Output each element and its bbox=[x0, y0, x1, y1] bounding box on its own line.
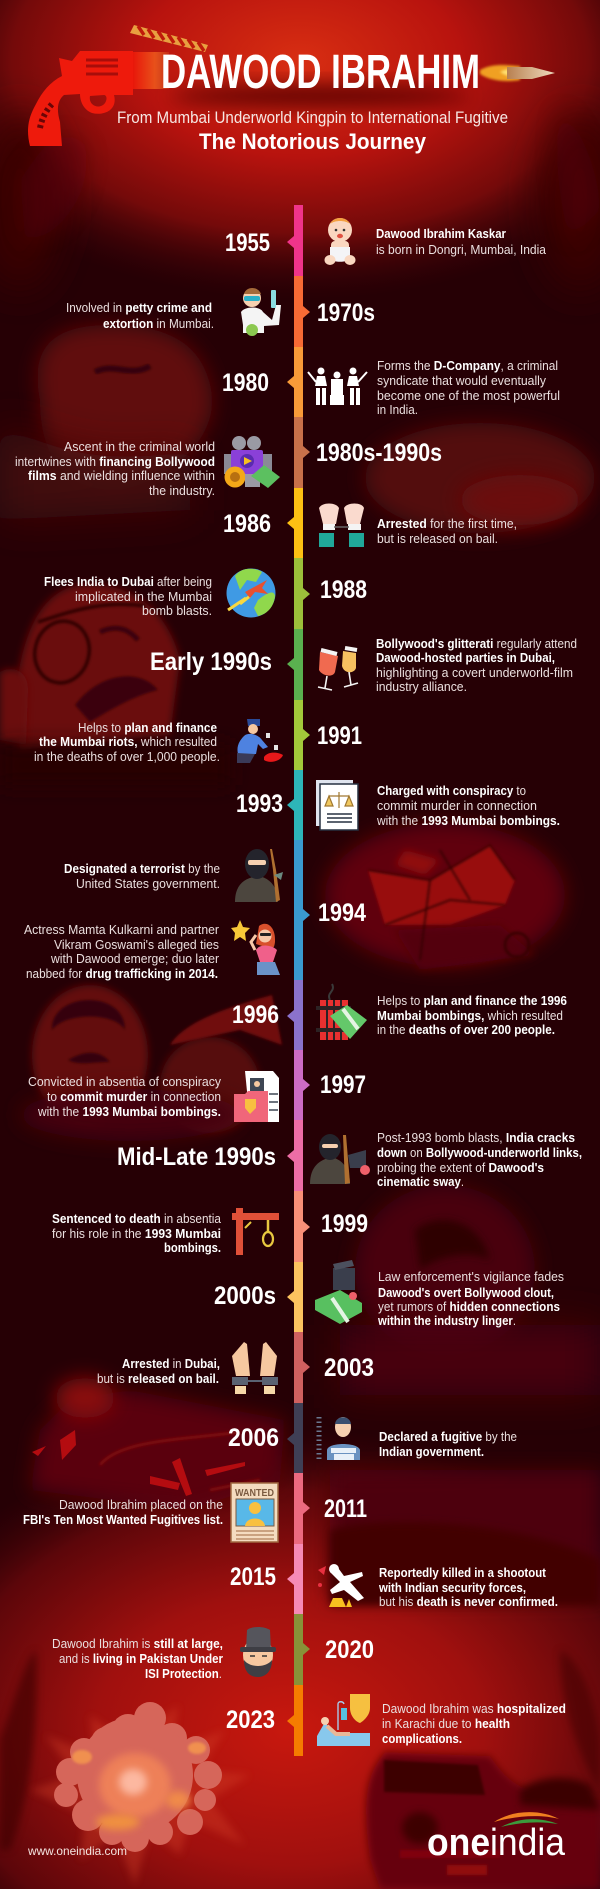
logo: oneindia: oneindia bbox=[427, 1822, 566, 1864]
icon: police file folder bbox=[234, 1071, 279, 1122]
icon: gallows bbox=[232, 1208, 279, 1255]
text: 1970s: extortion in Mumbai. bbox=[103, 316, 214, 331]
text: 1980s-1990s bbox=[15, 439, 215, 498]
text: Mid-Late 1990s: Post-1993 bomb blasts, India cracks bbox=[377, 1130, 575, 1145]
text: 1996: Helps to plan and finance the 1996 bbox=[377, 993, 567, 1008]
text: 1996: Mumbai bombings, which resulted bbox=[377, 1008, 563, 1023]
icon: bearded man with hat bbox=[240, 1627, 276, 1677]
text: 2011 bbox=[23, 1497, 223, 1527]
text: 2006: Declared a fugitive by the bbox=[379, 1429, 517, 1444]
entry: Mid-Late 1990s bbox=[117, 1130, 582, 1189]
text: 2015: but his death is never confirmed. bbox=[379, 1594, 558, 1609]
text: 2003: Arrested in Dubai, bbox=[122, 1356, 220, 1371]
text: actress bbox=[24, 922, 220, 981]
text: 2020: and is living in Pakistan Under bbox=[59, 1651, 223, 1666]
text: 2011: Dawood Ibrahim placed on the bbox=[59, 1497, 223, 1512]
text: terrorist bbox=[64, 861, 220, 891]
year 1997: 1997 bbox=[320, 1071, 366, 1099]
text: 1999: Sentenced to death in absentia bbox=[52, 1211, 222, 1226]
year 2011: 2011 bbox=[324, 1495, 367, 1523]
entry: Early 1990s bbox=[150, 636, 577, 694]
title: DAWOOD IBRAHIM bbox=[161, 46, 480, 99]
text: 1980s-1990s: films and wielding influence within bbox=[28, 468, 215, 483]
text: 1993 bbox=[376, 783, 560, 828]
entry: 2000s bbox=[214, 1260, 564, 1328]
subtitle: From Mumbai Underworld Kingpin to International Fugitive bbox=[117, 108, 508, 127]
year 2006: 2006 bbox=[228, 1424, 279, 1452]
text: 1999: bombings. bbox=[164, 1240, 221, 1255]
icon: terrorist with rifle bbox=[235, 849, 283, 902]
icon: handcuffed fists bbox=[319, 504, 364, 547]
text: 2000s bbox=[377, 1269, 564, 1328]
background photo: man with glasses bbox=[0, 584, 230, 785]
text: Early 1990s: Bollywood's glitterati regularly attend bbox=[376, 636, 577, 651]
entry: 2023 bbox=[226, 1694, 566, 1746]
background photo: rubble bbox=[30, 1378, 285, 1510]
text: 2000s: within the industry linger. bbox=[377, 1313, 516, 1328]
entry: 1991 bbox=[34, 719, 362, 764]
background photo: crowd top right bbox=[365, 423, 595, 533]
text: 2023: Dawood Ibrahim was hospitalized bbox=[382, 1701, 566, 1716]
text: Early 1990s: highlighting a covert underworld-film bbox=[376, 665, 573, 680]
year 1991: 1991 bbox=[317, 722, 362, 750]
icon: crime syndicate boss bbox=[308, 368, 367, 405]
text: 1991: in the deaths of over 1,000 people. bbox=[34, 749, 220, 764]
year 1993: 1993 bbox=[236, 790, 283, 818]
text: Early 1990s: industry alliance. bbox=[376, 679, 467, 694]
text: 2015: with Indian security forces, bbox=[378, 1580, 526, 1595]
entry: 1993 bbox=[236, 780, 560, 830]
text: 1993: Charged with conspiracy to bbox=[377, 783, 526, 798]
icon: masked criminal with test tube bbox=[241, 288, 281, 336]
text: actress: with Dawood emerge; duo later bbox=[50, 951, 220, 966]
entry: 2003 bbox=[97, 1342, 374, 1394]
background photo: man at right bbox=[340, 1185, 600, 1395]
text: 1993: commit murder in connection bbox=[377, 798, 537, 813]
gun illustration bbox=[28, 25, 208, 146]
year 1988: 1988 bbox=[320, 576, 367, 604]
text: 2020: Dawood Ibrahim is still at large, bbox=[52, 1636, 223, 1651]
text: 1991: Helps to plan and finance bbox=[78, 720, 217, 735]
entry: 1980s-1990s bbox=[15, 436, 442, 498]
icon: money and clapperboard bbox=[315, 1260, 362, 1324]
text: 1988: implicated in the Mumbai bbox=[75, 589, 212, 604]
text: 1991 bbox=[34, 720, 220, 764]
text: 2003: but is released on bail. bbox=[97, 1371, 219, 1386]
year 1970s: 1970s bbox=[317, 299, 375, 327]
entry: 2015 bbox=[230, 1563, 558, 1609]
icon: wanted poster bbox=[231, 1483, 278, 1542]
text: 1997: to commit murder in connection bbox=[47, 1089, 221, 1104]
text: 2006: Indian government. bbox=[379, 1444, 484, 1459]
icon: wine glasses bbox=[318, 648, 358, 690]
background photo: car at bottom bbox=[366, 1752, 600, 1889]
entry: 1994 bbox=[24, 849, 366, 981]
text: Mid-Late 1990s: down on Bollywood-underworld links, bbox=[377, 1145, 582, 1160]
text: 1986 bbox=[377, 516, 517, 546]
text: 2000s: yet rumors of hidden connections bbox=[378, 1299, 560, 1314]
text: 1970s bbox=[66, 300, 214, 331]
text: 1986: Arrested for the first time, bbox=[377, 516, 517, 531]
entry: 1970s bbox=[66, 288, 375, 336]
year 2020: 2020 bbox=[325, 1636, 374, 1664]
icon: hazard clapper stripe bbox=[130, 25, 208, 52]
text: 1997: with the 1993 Mumbai bombings. bbox=[37, 1104, 221, 1119]
background photo: man with moustache bbox=[0, 325, 212, 520]
text: 1996 bbox=[377, 993, 567, 1037]
text: 1997: Convicted in absentia of conspiracy bbox=[28, 1074, 221, 1089]
subheading: The Notorious Journey bbox=[199, 129, 427, 154]
text: actress: Vikram Goswami's alleged ties bbox=[54, 937, 219, 952]
entry: 1988 bbox=[44, 568, 367, 618]
text: actress: nabbed for drug trafficking in 2014. bbox=[26, 966, 218, 981]
icon: actress with star bbox=[231, 920, 280, 975]
year 1955: 1955 bbox=[225, 229, 270, 257]
icon: cuffed hands bbox=[232, 1342, 278, 1394]
text: 1980: syndicate that would eventually bbox=[377, 373, 546, 388]
entry: 2020 bbox=[52, 1627, 374, 1681]
year Mid-Late 1990s: Mid-Late 1990s bbox=[117, 1143, 276, 1171]
icon: hospital bed bbox=[317, 1694, 370, 1746]
text: 2023: in Karachi due to health bbox=[382, 1716, 510, 1731]
text: 1980s-1990s: the industry. bbox=[149, 483, 215, 498]
year 2000s: 2000s bbox=[214, 1282, 276, 1310]
entry: 1986 bbox=[223, 504, 517, 547]
year 1980: 1980 bbox=[222, 369, 269, 397]
text: Mid-Late 1990s bbox=[377, 1130, 582, 1189]
text: 1999 bbox=[52, 1211, 222, 1255]
text: 1991: the Mumbai riots, which resulted bbox=[39, 734, 217, 749]
text: Mid-Late 1990s: cinematic sway. bbox=[377, 1174, 464, 1189]
icon: chalk body outline bbox=[318, 1564, 364, 1607]
text: 1996: in the deaths of over 200 people. bbox=[377, 1022, 555, 1037]
year 1980s-1990s: 1980s-1990s bbox=[316, 439, 442, 467]
entry: 1955 bbox=[225, 218, 547, 265]
year Early 1990s: Early 1990s bbox=[150, 648, 272, 676]
text: 2006 bbox=[379, 1429, 517, 1459]
entry: 1997 bbox=[28, 1071, 366, 1122]
icon: dynamite and money bbox=[316, 984, 367, 1040]
website url: www.oneindia.com bbox=[27, 1844, 127, 1858]
text: 2003 bbox=[97, 1356, 220, 1386]
text: 1993: with the 1993 Mumbai bombings. bbox=[376, 813, 560, 828]
icon: film camera and money bbox=[224, 436, 280, 488]
text: 1980: in India. bbox=[377, 402, 418, 417]
entry: 2011 bbox=[23, 1483, 367, 1542]
text: 1980: become one of the most powerful bbox=[377, 388, 560, 403]
text: 1970s: Involved in petty crime and bbox=[66, 300, 212, 315]
text: 2000s: Law enforcement's vigilance fades bbox=[378, 1269, 564, 1284]
text: 1986: but is released on bail. bbox=[377, 531, 498, 546]
icon: globe with plane bbox=[226, 568, 276, 618]
explosion bbox=[30, 1702, 250, 1885]
text: 1980: Forms the D-Company, a criminal bbox=[377, 358, 558, 373]
icon: mugshot bbox=[319, 1417, 360, 1460]
text: terrorist: Designated a terrorist by the bbox=[64, 861, 220, 876]
year 1994: 1994 bbox=[318, 899, 366, 927]
icon: police at crime scene bbox=[237, 719, 283, 763]
text: terrorist: United States government. bbox=[76, 876, 220, 891]
text: 1988 bbox=[44, 574, 212, 618]
entry: 1980 bbox=[222, 358, 560, 417]
text: 2015: Reportedly killed in a shootout bbox=[379, 1565, 547, 1580]
text: 1980s-1990s: intertwines with financing Bollywood bbox=[15, 454, 215, 469]
timeline bar bbox=[287, 205, 310, 1756]
text: 1955: is born in Dongri, Mumbai, India bbox=[376, 242, 547, 257]
text: 1988: bomb blasts. bbox=[142, 603, 212, 618]
year 2023: 2023 bbox=[226, 1706, 275, 1734]
text: 2015 bbox=[378, 1565, 558, 1609]
icon: legal document bbox=[316, 780, 358, 830]
icon: wanted poster: WANTED bbox=[235, 1488, 274, 1499]
background photo: crowd and car right bbox=[330, 1470, 600, 1605]
year 2015: 2015 bbox=[230, 1563, 276, 1591]
background photo: wrecked car bbox=[325, 823, 565, 970]
entry: 2006 bbox=[228, 1417, 517, 1460]
text: Early 1990s bbox=[376, 636, 577, 694]
year 1996: 1996 bbox=[232, 1001, 279, 1029]
text: 2023: complications. bbox=[382, 1731, 462, 1746]
text: 1999: for his role in the 1993 Mumbai bbox=[52, 1226, 221, 1241]
text: actress: Actress Mamta Kulkarni and partner bbox=[24, 922, 220, 937]
year 1986: 1986 bbox=[223, 510, 271, 538]
text: 1955: Dawood Ibrahim Kaskar bbox=[376, 226, 506, 241]
text: 1988: Flees India to Dubai after being bbox=[44, 574, 212, 589]
text: Early 1990s: Dawood-hosted parties in Dubai, bbox=[376, 650, 555, 665]
text: 1997 bbox=[28, 1074, 221, 1119]
text: 1980 bbox=[377, 358, 560, 417]
icon: terrorist with clapperboard bbox=[310, 1134, 370, 1184]
entry: 1999 bbox=[52, 1208, 368, 1255]
text: 2000s: Dawood's overt Bollywood clout, bbox=[378, 1285, 554, 1300]
text: 2023 bbox=[382, 1701, 566, 1746]
year 2003: 2003 bbox=[324, 1354, 374, 1382]
text: 1955 bbox=[376, 226, 547, 257]
background photo: two men bbox=[20, 985, 282, 1141]
icon: baby bbox=[324, 218, 356, 265]
text: 2011: FBI's Ten Most Wanted Fugitives list. bbox=[23, 1512, 223, 1527]
text: 2020 bbox=[52, 1636, 223, 1681]
text: 1980s-1990s: Ascent in the criminal world bbox=[64, 439, 215, 454]
entry: 1996 bbox=[232, 984, 567, 1040]
text: 2020: ISI Protection. bbox=[145, 1666, 222, 1681]
text: Mid-Late 1990s: probing the extent of Dawood's bbox=[377, 1160, 544, 1175]
year 1999: 1999 bbox=[321, 1210, 368, 1238]
bullet bbox=[480, 65, 555, 81]
